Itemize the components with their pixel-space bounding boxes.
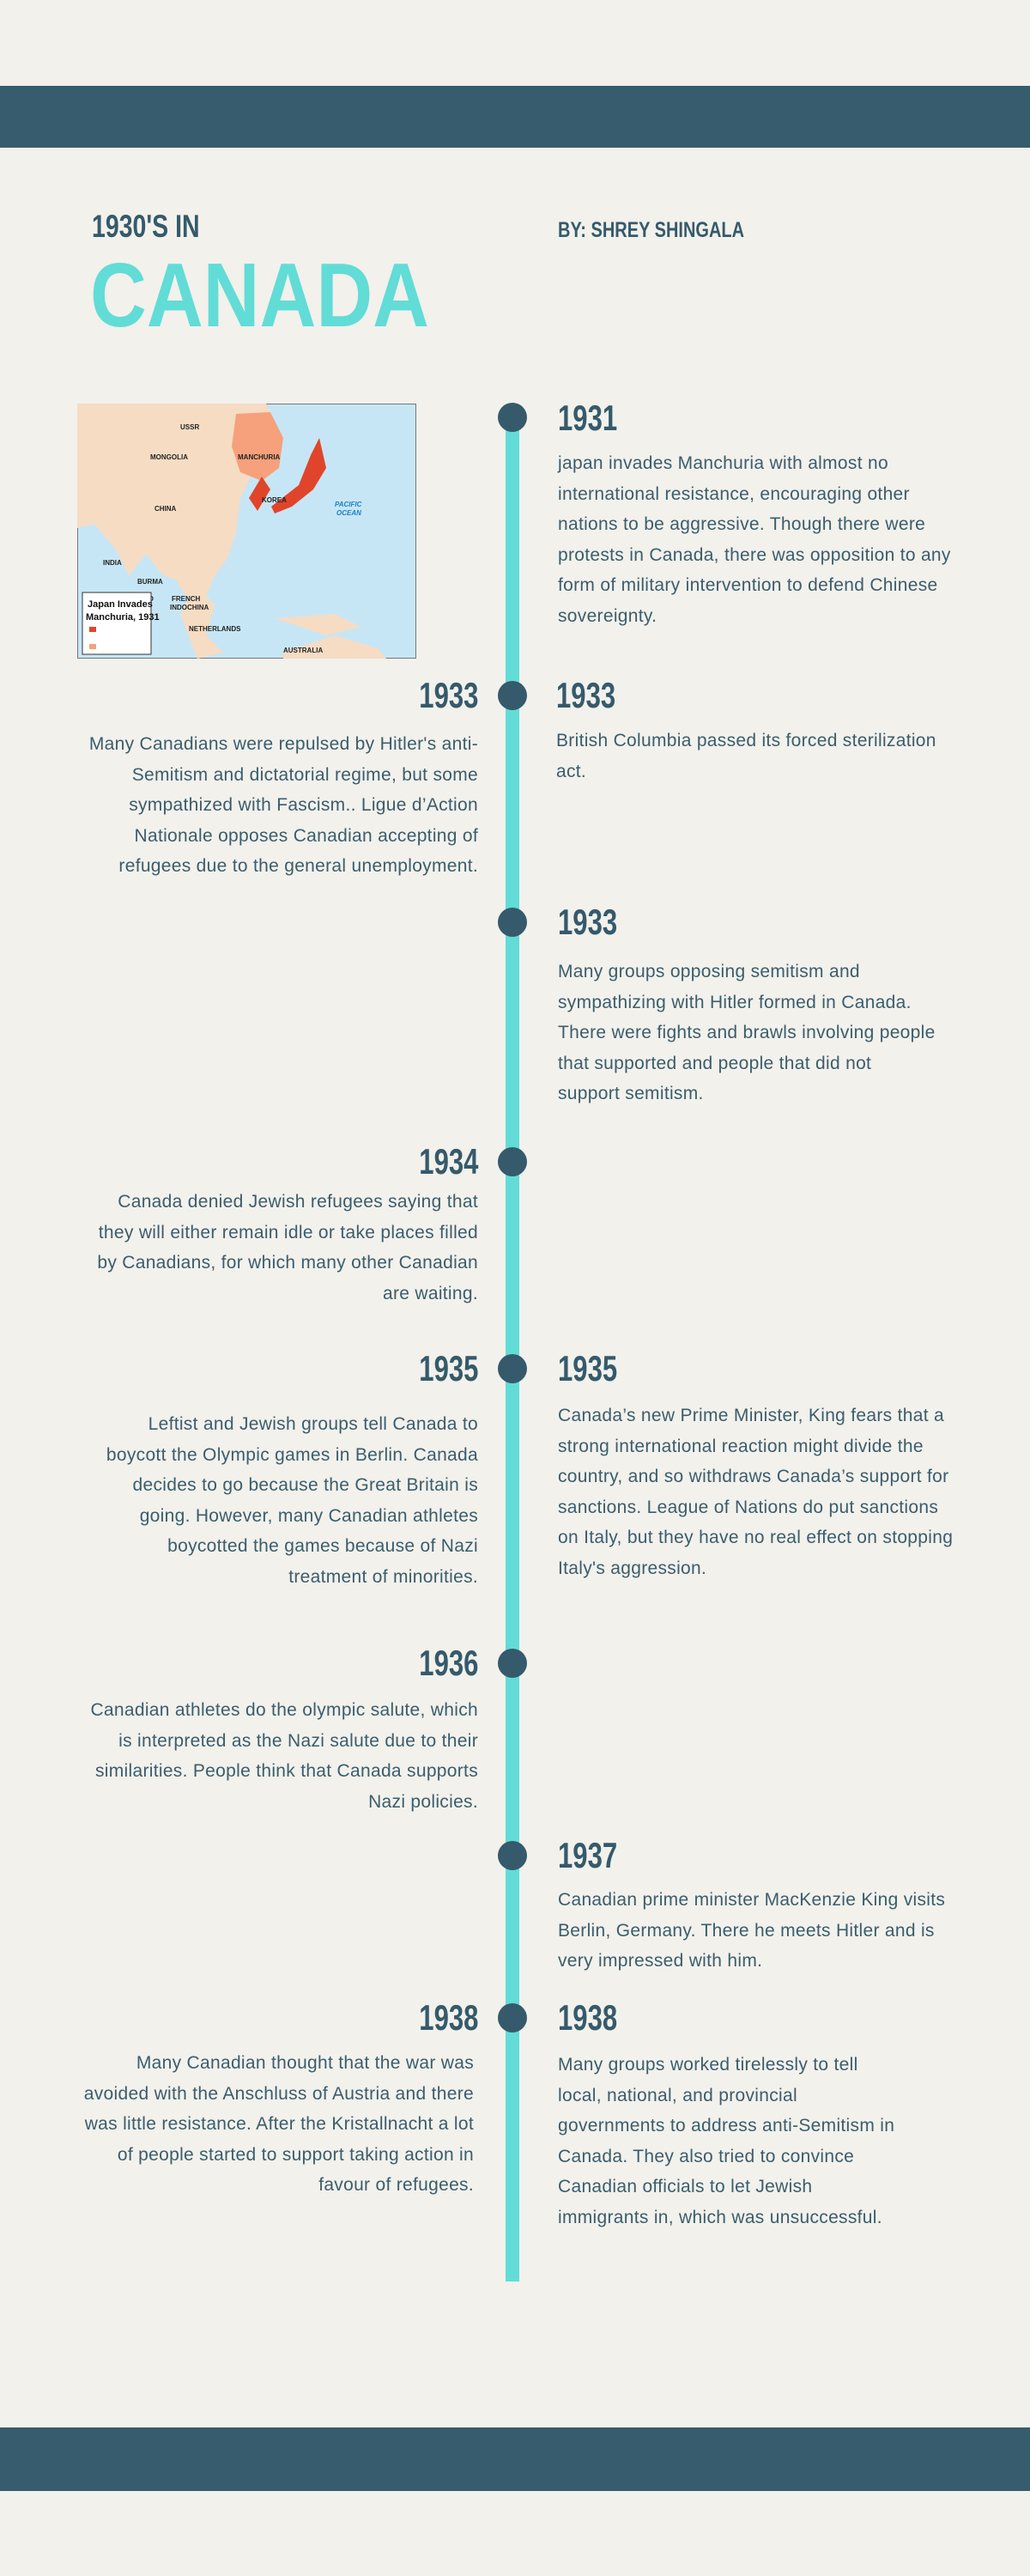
text: boycotted the games because of Nazi (167, 1536, 478, 1556)
text: on Italy, but they have no real effect on stopping (558, 1528, 953, 1547)
map: Japan invades Manchuria: BURMA (137, 578, 163, 586)
map: Japan invades Manchuria: FRENCH (172, 595, 201, 603)
text (558, 453, 951, 626)
text: form of military intervention to defend Chinese (558, 575, 937, 595)
entry 1931 right (498, 398, 951, 626)
text: Many groups opposing semitism and (558, 962, 860, 981)
text: Berlin, Germany. There he meets Hitler and is (558, 1921, 935, 1941)
text: Semitism and dictatorial regime, but some (132, 765, 478, 785)
text: Many Canadian thought that the war was (136, 2053, 474, 2073)
text: favour of refugees. (318, 2175, 474, 2195)
title: CANADA: CANADA (90, 245, 429, 346)
text: governments to address anti-Semitism in (558, 2116, 894, 2136)
entry 1933 right b (558, 902, 936, 1103)
text: Canada denied Jewish refugees saying that (118, 1192, 478, 1212)
text: Leftist and Jewish groups tell Canada to (148, 1414, 478, 1434)
text: protests in Canada, there was opposition to any (558, 545, 951, 565)
text: refugees due to the general unemployment. (118, 856, 478, 876)
entry 1934 left (97, 1141, 479, 1303)
dot 1937 (498, 1841, 527, 1870)
text (558, 1890, 945, 1971)
text: There were fights and brawls involving people (558, 1023, 936, 1042)
dot 1935 (498, 1354, 527, 1383)
text: support semitism. (558, 1084, 704, 1103)
subtitle: 1930'S IN: 1930'S IN (92, 209, 200, 244)
map: Japan invades Manchuria: INDOCHINA (170, 604, 209, 611)
text: are waiting. (383, 1284, 478, 1303)
dot 1933 (498, 681, 527, 710)
text: Nationale opposes Canadian accepting of (135, 826, 478, 846)
year: 1938 (419, 1997, 478, 2038)
text: japan invades Manchuria with almost no (558, 453, 888, 473)
text (558, 1406, 953, 1578)
map: Japan invades Manchuria: Japan Invades (88, 599, 153, 610)
author: BY: SHREY SHINGALA (558, 218, 744, 242)
text (106, 1414, 478, 1587)
map: Japan invades Manchuria: MANCHURIA (238, 453, 281, 461)
text: sovereignty. (558, 606, 657, 626)
dot (498, 403, 527, 432)
text: treatment of minorities. (288, 1567, 478, 1587)
text: strong international reaction might divide the (558, 1437, 924, 1456)
map: Japan invades Manchuria: NETHERLANDS (189, 625, 241, 633)
text: Many groups worked tirelessly to tell (558, 2055, 858, 2075)
text: is interpreted as the Nazi salute due to their (118, 1731, 478, 1751)
dot 1933 b (498, 908, 527, 937)
dot 1938 (498, 2003, 527, 2032)
text: that supported and people that did not (558, 1054, 871, 1073)
text: Canada’s new Prime Minister, King fears that a (558, 1406, 944, 1425)
map: Japan invades Manchuria: USSR (180, 423, 199, 431)
text (90, 1700, 478, 1812)
year: 1937 (558, 1835, 617, 1875)
bottom banner (0, 2427, 1030, 2491)
map: Japan invades Manchuria: CHINA (154, 505, 177, 513)
text: sympathizing with Hitler formed in Canada. (558, 993, 912, 1012)
text: nations to be aggressive. Though there were (558, 514, 925, 534)
year: 1935 (419, 1348, 478, 1388)
text: avoided with the Anschluss of Austria and there (84, 2084, 474, 2104)
entry 1938 right (558, 1997, 894, 2227)
text: decides to go because the Great Britain is (132, 1475, 478, 1495)
entry 1935 right (558, 1348, 953, 1578)
text (84, 2053, 474, 2195)
text: going. However, many Canadian athletes (140, 1506, 478, 1526)
text: Canadian athletes do the olympic salute, which (90, 1700, 478, 1720)
text: local, national, and provincial (558, 2086, 797, 2105)
dot 1936 (498, 1649, 527, 1678)
year: 1934 (419, 1141, 478, 1182)
text: was little resistance. After the Kristallnacht a lot (85, 2114, 474, 2134)
text: Italy's aggression. (558, 1558, 706, 1578)
text (97, 1192, 478, 1303)
text (558, 962, 936, 1103)
text: sympathized with Fascism.. Ligue d’Action (129, 795, 478, 815)
entry 1937 right (558, 1835, 945, 1971)
text: sanctions. League of Nations do put sanctions (558, 1498, 938, 1517)
entry 1933 left (89, 675, 478, 876)
map: Japan invades Manchuria: Manchuria, 1931 (86, 612, 160, 623)
dot 1934 (498, 1147, 527, 1176)
text: Canadian prime minister MacKenzie King visits (558, 1890, 945, 1910)
map: Japan invades Manchuria: KOREA (262, 496, 287, 504)
year: 1938 (558, 1997, 617, 2038)
map: Japan invades Manchuria (77, 404, 416, 659)
text: Nazi policies. (368, 1792, 478, 1812)
text: British Columbia passed its forced sterilization (556, 731, 936, 750)
text: they will either remain idle or take places filled (99, 1223, 478, 1242)
map: Japan invades Manchuria: THAILAND (118, 595, 154, 603)
year: 1935 (558, 1348, 617, 1388)
text: of people started to support taking action in (118, 2145, 474, 2165)
map: Japan invades Manchuria: INDIA (103, 559, 122, 567)
year: 1933 (556, 675, 615, 715)
year: 1936 (419, 1643, 478, 1683)
year: 1933 (558, 902, 617, 942)
year: 1931 (558, 398, 617, 438)
entry 1935 left (106, 1348, 478, 1587)
top banner (0, 86, 1030, 148)
text: Canada. They also tried to convince (558, 2147, 854, 2166)
text (89, 734, 478, 876)
year: 1933 (419, 675, 478, 715)
text: immigrants in, which was unsuccessful. (558, 2208, 882, 2227)
text: Many Canadians were repulsed by Hitler's anti- (89, 734, 478, 754)
text: very impressed with him. (558, 1951, 762, 1971)
text: by Canadians, for which many other Canadian (97, 1253, 478, 1273)
entry 1936 left (90, 1643, 478, 1812)
map: Japan invades Manchuria: AUSTRALIA (283, 647, 323, 654)
entry 1933 right (556, 675, 936, 781)
map: Japan invades Manchuria: PACIFIC (335, 501, 362, 508)
text (556, 731, 936, 781)
map: Japan invades Manchuria: MONGOLIA (150, 453, 188, 461)
timeline line (506, 417, 519, 2281)
text: international resistance, encouraging other (558, 484, 910, 504)
text (558, 2055, 894, 2227)
text: similarities. People think that Canada supports (95, 1761, 478, 1781)
text: act. (556, 762, 586, 781)
map: Japan invades Manchuria: OCEAN (336, 509, 361, 517)
entry 1938 left (84, 1997, 478, 2195)
text: Canadian officials to let Jewish (558, 2177, 812, 2196)
text: boycott the Olympic games in Berlin. Canada (106, 1445, 478, 1465)
text: country, and so withdraws Canada’s support for (558, 1467, 948, 1486)
